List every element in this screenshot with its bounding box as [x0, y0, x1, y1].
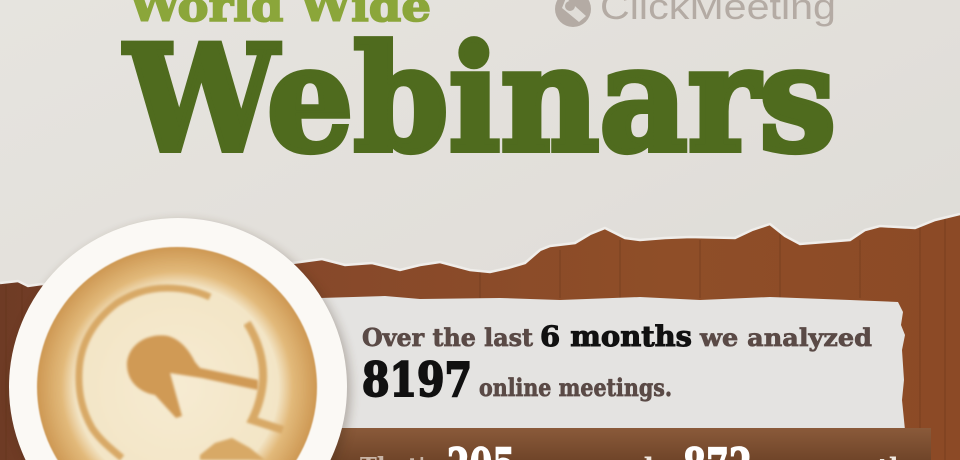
latte art ring: [79, 288, 210, 458]
logo icon: [555, 0, 591, 27]
text: over the last: Over the last: [362, 323, 533, 352]
text: 6 months: 6 months: [540, 320, 692, 353]
logo: ClickMeeting: [555, 0, 836, 27]
text: 8197 online meetings: [362, 353, 672, 408]
latte art lower tail: [200, 438, 265, 460]
text: 8197: 8197: [362, 353, 472, 408]
coffee foam: [37, 247, 317, 460]
text: per week and per month: [360, 438, 907, 460]
text: online meetings: online meetings.: [479, 373, 672, 402]
text: over the last 6 months: [362, 320, 872, 353]
cup shadow: [11, 221, 351, 460]
panel: analysis note: [320, 296, 905, 430]
wood table: [0, 214, 960, 460]
latte art hand blob: [127, 335, 258, 418]
torn paper card: [320, 296, 905, 430]
title: Webinars: Webinars: [123, 14, 836, 185]
cup rim: [9, 218, 347, 460]
icon: coffee cup: [9, 218, 351, 460]
text: we analyzed: we analyzed: [699, 323, 872, 352]
latte art right arc: [247, 323, 283, 430]
panel: brown band: [320, 428, 931, 460]
